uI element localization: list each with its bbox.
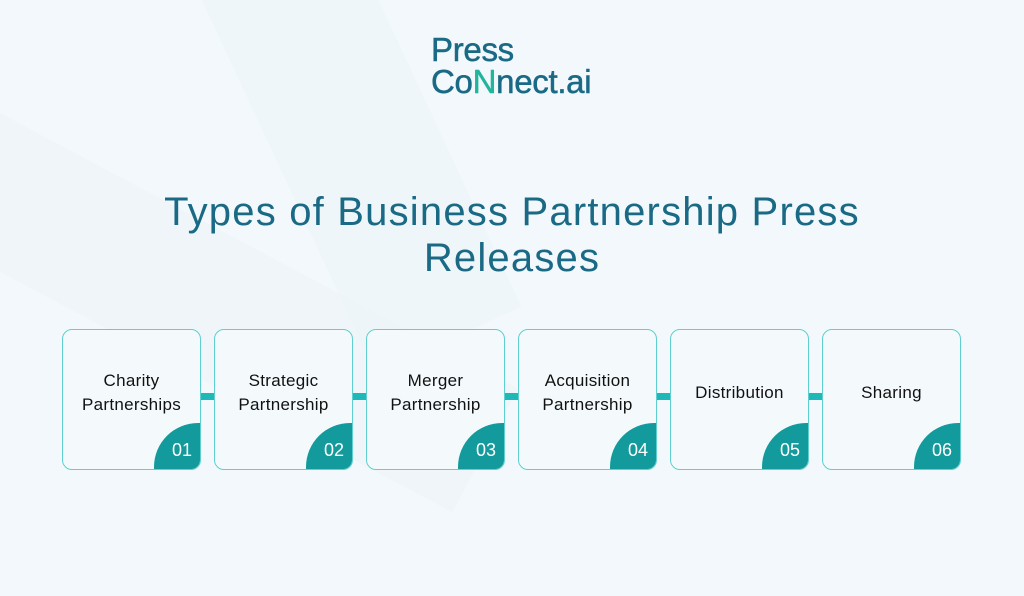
- card 1: Partnerships: [82, 395, 181, 414]
- card 4: 04: [628, 440, 648, 460]
- card 3: Partnership: [390, 395, 481, 414]
- card 2: 02: [324, 440, 344, 460]
- card 6: [822, 329, 961, 470]
- card 2: Strategic: [249, 371, 318, 390]
- card 1: [62, 329, 201, 470]
- card 3: [366, 329, 505, 470]
- card 5: 05: [780, 440, 800, 460]
- card 4: Acquisition: [545, 371, 630, 390]
- title: [164, 190, 860, 280]
- connector: [201, 393, 214, 400]
- connector: [505, 393, 518, 400]
- card 5: [670, 329, 809, 470]
- card 3: 03: [476, 440, 496, 460]
- logo: Press: [431, 31, 514, 68]
- connector: [657, 393, 670, 400]
- card 6: Sharing: [861, 383, 922, 402]
- card 1: Charity: [104, 371, 159, 390]
- title: Releases: [424, 236, 600, 280]
- connector: [809, 393, 822, 400]
- card 4: Partnership: [542, 395, 633, 414]
- card 5: Distribution: [695, 383, 784, 402]
- logo: CoNnect.ai: [431, 63, 591, 100]
- card 1: 01: [172, 440, 192, 460]
- card 4: [518, 329, 657, 470]
- card 2: Partnership: [238, 395, 329, 414]
- logo: [431, 31, 591, 100]
- card 3: Merger: [408, 371, 463, 390]
- card 2: [214, 329, 353, 470]
- title: Types of Business Partnership Press: [164, 190, 860, 234]
- card 6: 06: [932, 440, 952, 460]
- connector: [353, 393, 366, 400]
